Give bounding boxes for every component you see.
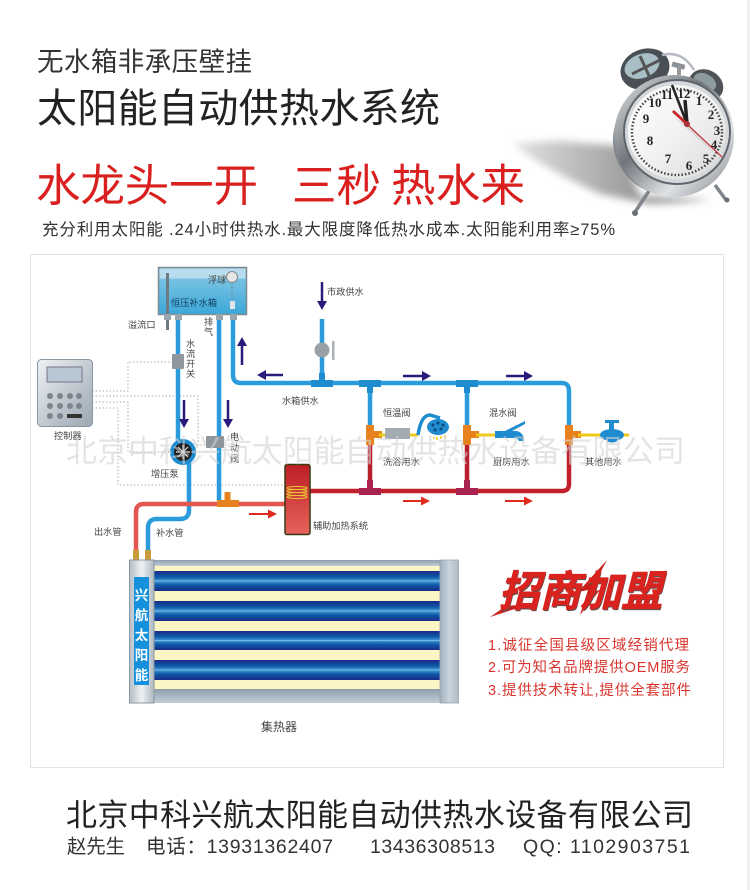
description line: 充分利用太阳能 .24小时供热水.最大限度降低热水成本.太阳能利用率≥75% xyxy=(42,220,615,239)
diagram labels xyxy=(54,286,622,538)
icon: booster pump xyxy=(170,439,196,465)
footer: contacts: 13436308513 xyxy=(370,836,495,858)
franchise list: 2.可为知名品牌提供OEM服务 xyxy=(488,659,690,676)
diagram labels: 混水阀 xyxy=(489,407,517,418)
diagram labels: 水箱供水 xyxy=(282,395,319,406)
diagram labels: 出水管 xyxy=(94,526,122,537)
diagram labels: 关 xyxy=(186,368,195,379)
red slogan: 三秒 xyxy=(292,162,381,211)
icon: alarm clock: 10 xyxy=(648,95,662,110)
diagram labels: 市政供水 xyxy=(327,286,364,297)
brand label: 航 xyxy=(135,607,149,623)
icon: float ball xyxy=(226,272,238,282)
diagram labels: 溢流口 xyxy=(128,319,156,330)
icon: alarm clock: 9 xyxy=(643,111,650,126)
brand label: 阳 xyxy=(135,648,148,663)
heading: franchise: 招商加盟 xyxy=(497,570,672,617)
icon: auxiliary heater xyxy=(285,464,310,534)
diagram labels: 排 xyxy=(204,316,213,327)
label: collector: 集热器 xyxy=(261,719,297,734)
flow arrows: navy xyxy=(179,282,533,428)
red slogan: 热水来 xyxy=(391,162,525,211)
icon: alarm clock: 7 xyxy=(665,151,672,166)
icon: alarm clock: 6 xyxy=(686,158,693,173)
diagram labels: 其他用水 xyxy=(585,456,622,467)
red slogan: 水龙头一开 xyxy=(36,162,258,211)
brand label xyxy=(135,588,149,683)
diagram labels: 控制器 xyxy=(54,430,82,441)
icon: controller xyxy=(38,360,92,426)
icon: kitchen tap xyxy=(476,421,525,441)
franchise list: 3.提供技术转让,提供全套部件 xyxy=(488,681,691,699)
icon: city water valve xyxy=(314,341,334,360)
icon: flow switch xyxy=(172,354,184,369)
page right edge xyxy=(747,0,750,890)
franchise list xyxy=(488,636,691,699)
body xyxy=(613,84,731,196)
pipes: hot water xyxy=(136,445,569,552)
diagram labels: 阀 xyxy=(230,454,239,464)
diagram labels: 辅助加热系统 xyxy=(313,520,368,531)
footer: contacts: 赵先生 xyxy=(67,836,125,858)
icon: alarm clock: 5 xyxy=(703,151,710,166)
clock shadow xyxy=(512,141,712,204)
diagram labels: 恒温阀 xyxy=(383,407,411,418)
bells xyxy=(615,42,675,96)
footer: contacts xyxy=(67,836,690,858)
franchise list: 1.诚征全国县级区域经销代理 xyxy=(488,636,690,654)
icon: alarm clock: 2 xyxy=(708,107,714,122)
diagram labels: 水 xyxy=(186,338,195,349)
heading: franchise: 招商加盟 xyxy=(497,569,671,616)
control wiring xyxy=(92,362,285,485)
red slogan xyxy=(36,162,525,211)
brand label: 太 xyxy=(135,628,149,643)
subtitle: wall mounted non-pressurized: 无水箱非承压壁挂 xyxy=(37,47,252,77)
brand label: 兴 xyxy=(135,588,149,603)
watermark: 北京中科兴航太阳能自动供热水设备有限公司 xyxy=(66,434,685,469)
icon: alarm clock: 8 xyxy=(647,133,654,148)
icon: alarm clock xyxy=(613,42,734,216)
icon: other use tap xyxy=(578,420,629,442)
diagram labels: 开 xyxy=(186,359,195,369)
pipe fittings xyxy=(133,314,581,560)
diagram labels: 动 xyxy=(230,443,239,453)
icon: alarm clock: 12 xyxy=(678,86,690,101)
pipes: cold water xyxy=(148,316,569,552)
diagram labels: 气 xyxy=(204,326,213,337)
diagram labels: 增压泵 xyxy=(151,468,179,479)
flow arrows: red xyxy=(249,496,533,518)
footer: contacts: 电话：13931362407 xyxy=(146,836,333,858)
panel: solar collector xyxy=(130,560,458,703)
footer: company name: 北京中科兴航太阳能自动供热水设备有限公司 xyxy=(66,798,693,833)
icon: alarm clock: 11 xyxy=(661,87,673,102)
diagram labels: 流 xyxy=(186,348,195,359)
diagram labels: 厨房用水 xyxy=(493,456,530,467)
diagram labels: 补水管 xyxy=(156,527,184,538)
diagram labels: 电 xyxy=(230,431,239,442)
panel: water tank xyxy=(158,268,246,330)
icon: shower xyxy=(379,415,449,440)
panel: system diagram frame xyxy=(30,254,724,768)
icon: alarm clock: 1 xyxy=(696,93,702,108)
diagram labels: 洗浴用水 xyxy=(383,456,420,467)
legs xyxy=(635,185,653,212)
footer: contacts: QQ: 1102903751 xyxy=(523,836,690,858)
brand label: 能 xyxy=(135,667,149,683)
label: tank: 恒压补水箱 xyxy=(171,297,217,308)
icon: alarm clock: 4 xyxy=(711,137,718,152)
main title: 太阳能自动供热水系统 xyxy=(37,87,440,131)
icon: alarm clock: 3 xyxy=(714,123,721,138)
label: float: 浮球 xyxy=(208,274,226,285)
icon: electric valve xyxy=(206,436,224,448)
